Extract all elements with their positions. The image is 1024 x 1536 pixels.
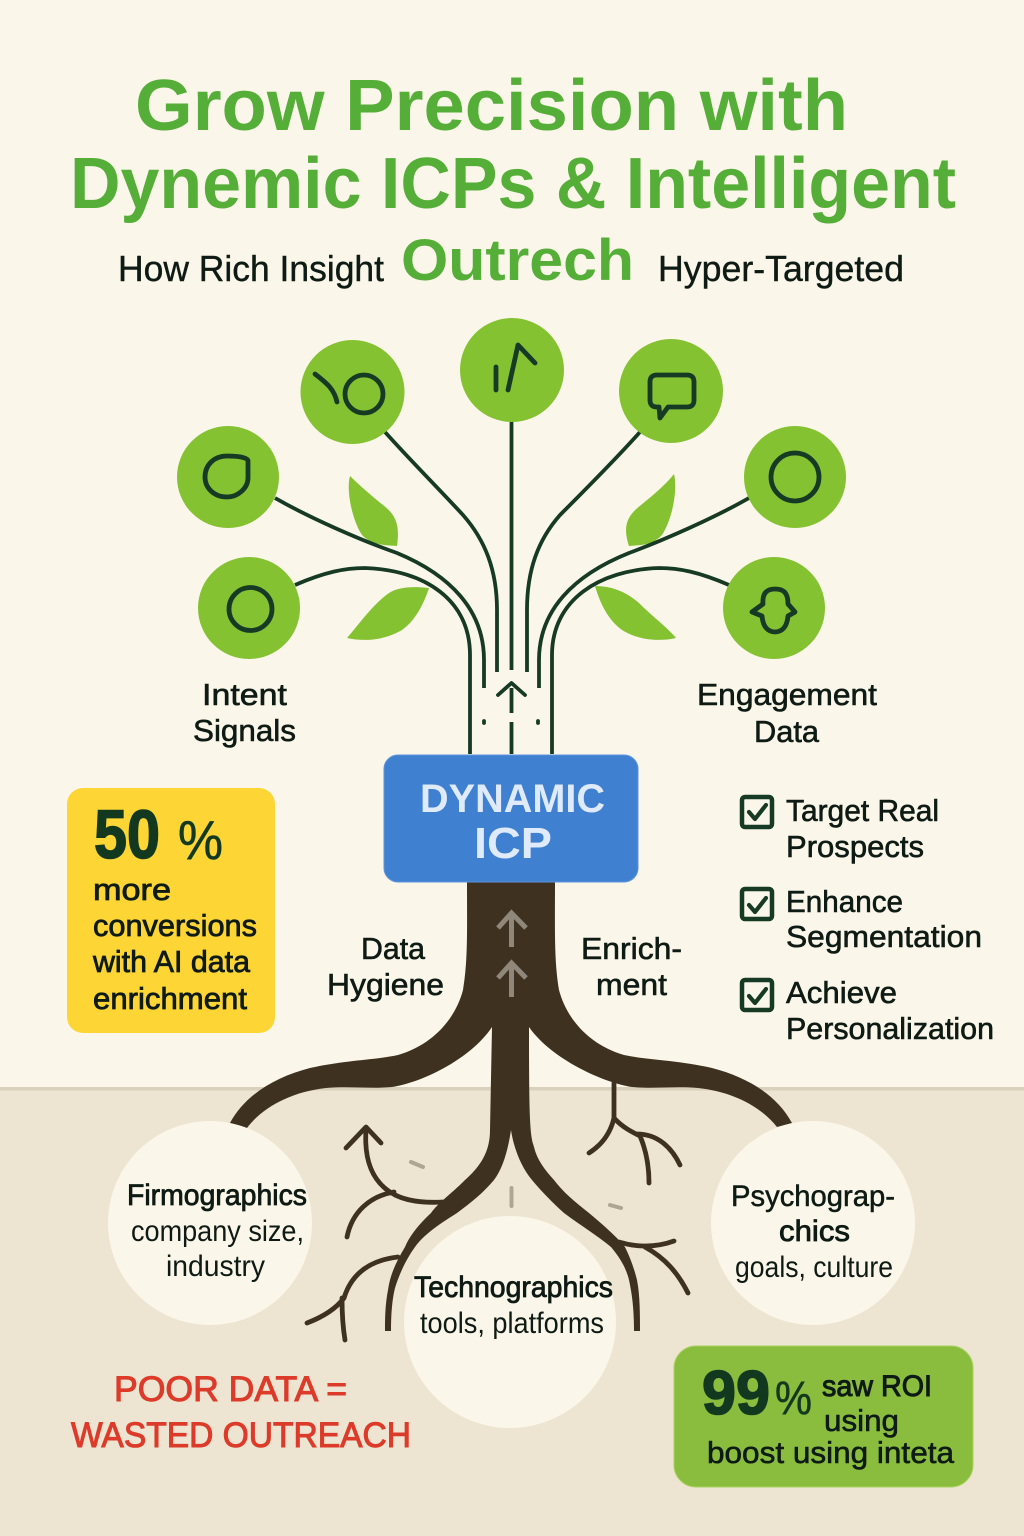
branch stems <box>275 420 749 754</box>
soil specks <box>411 1162 621 1208</box>
subtitle: Hyper-Targeted <box>658 248 904 289</box>
checkbox: target real prospects <box>742 797 772 827</box>
label: enrichment: ment <box>596 967 667 1002</box>
callout: 50% more conversions: more <box>93 872 171 907</box>
text: enhance segmentation: Enhance <box>786 884 903 919</box>
text: enhance segmentation <box>786 884 982 954</box>
root bubble: technographics: Technographics <box>414 1271 613 1304</box>
trunk flow arrows <box>498 913 526 997</box>
label: intent signals <box>193 677 296 748</box>
label: intent signals: Signals <box>193 713 296 748</box>
subtitle: How Rich Insight <box>118 248 384 289</box>
node: intent signals <box>198 557 300 659</box>
subtitle <box>118 228 904 293</box>
root bubble: psychographics: chics <box>779 1215 850 1248</box>
root bubble: psychographics: goals, culture <box>735 1251 893 1284</box>
callout: 99% saw ROI: boost using inteta <box>707 1435 955 1470</box>
node: mid left <box>177 426 279 528</box>
text: achieve personalization: Personalization <box>786 1011 994 1046</box>
callout: 99% saw ROI: using <box>824 1403 899 1438</box>
node: upper left <box>300 340 404 444</box>
label: enrichment: Enrich- <box>581 931 682 966</box>
callout: 99% saw ROI <box>674 1346 973 1487</box>
node: upper right speech bubble <box>619 339 723 443</box>
label: engagement data: Data <box>754 714 820 749</box>
callout: 50% more conversions: conversions <box>93 908 257 943</box>
checkbox: enhance segmentation <box>742 889 772 919</box>
callout: 50% more conversions: with AI data <box>92 944 251 979</box>
blue box: dynamic ICP: DYNAMIC <box>420 777 605 821</box>
callout: 50% more conversions <box>67 788 275 1033</box>
warning: poor data: POOR DATA = <box>114 1370 347 1409</box>
callout: 99% saw ROI: % <box>775 1371 812 1424</box>
callout: 99% saw ROI: 99 <box>702 1359 770 1428</box>
text: target real prospects: Prospects <box>786 829 924 864</box>
icon: up arrow between stems <box>484 683 538 723</box>
title: Dynemic ICPs & Intelligent <box>70 144 956 224</box>
label: data hygiene <box>327 931 444 1002</box>
text: achieve personalization: Achieve <box>786 975 897 1010</box>
checklist <box>742 793 994 1046</box>
root bubble: firmographics <box>108 1121 312 1325</box>
ground soil band <box>0 1087 1024 1536</box>
text: target real prospects: Target Real <box>786 793 939 828</box>
root bubble: technographics: tools, platforms <box>420 1307 604 1340</box>
text: enhance segmentation: Segmentation <box>786 919 982 954</box>
subtitle: Outrech <box>401 228 634 293</box>
blue box: dynamic ICP <box>384 755 638 882</box>
root bubble: firmographics: Firmographics <box>127 1179 307 1212</box>
text: achieve personalization <box>786 975 994 1046</box>
callout: 50% more conversions: enrichment <box>93 981 247 1016</box>
callout: 99% saw ROI: saw ROI <box>822 1370 932 1403</box>
title <box>70 66 956 224</box>
title: Grow Precision with <box>135 66 848 146</box>
thin root branches <box>307 1083 688 1340</box>
label: engagement data <box>697 677 877 749</box>
label: data hygiene: Data <box>361 931 426 966</box>
warning: poor data <box>71 1370 411 1455</box>
leaves <box>347 474 676 640</box>
trunk and main roots <box>230 880 792 1331</box>
callout: 50% more conversions: % <box>178 809 223 871</box>
callout: 50% more conversions: 50 <box>94 796 160 873</box>
label: engagement data: Engagement <box>697 677 877 712</box>
root bubble: technographics <box>404 1216 616 1428</box>
warning: poor data: WASTED OUTREACH <box>71 1416 411 1455</box>
node: mid right <box>744 426 846 528</box>
checkbox: achieve personalization <box>742 980 772 1010</box>
blue box: dynamic ICP: ICP <box>474 819 552 868</box>
label: enrichment <box>581 931 682 1002</box>
label: intent signals: Intent <box>202 677 287 712</box>
text: target real prospects <box>786 793 939 864</box>
node: engagement data <box>723 557 825 659</box>
root bubble: psychographics: Psychograp- <box>731 1180 895 1213</box>
root bubble: firmographics: company size, <box>131 1215 304 1248</box>
root bubble: psychographics <box>711 1121 915 1325</box>
root bubble: firmographics: industry <box>166 1250 265 1283</box>
node: top centre <box>460 318 564 422</box>
label: data hygiene: Hygiene <box>327 967 444 1002</box>
